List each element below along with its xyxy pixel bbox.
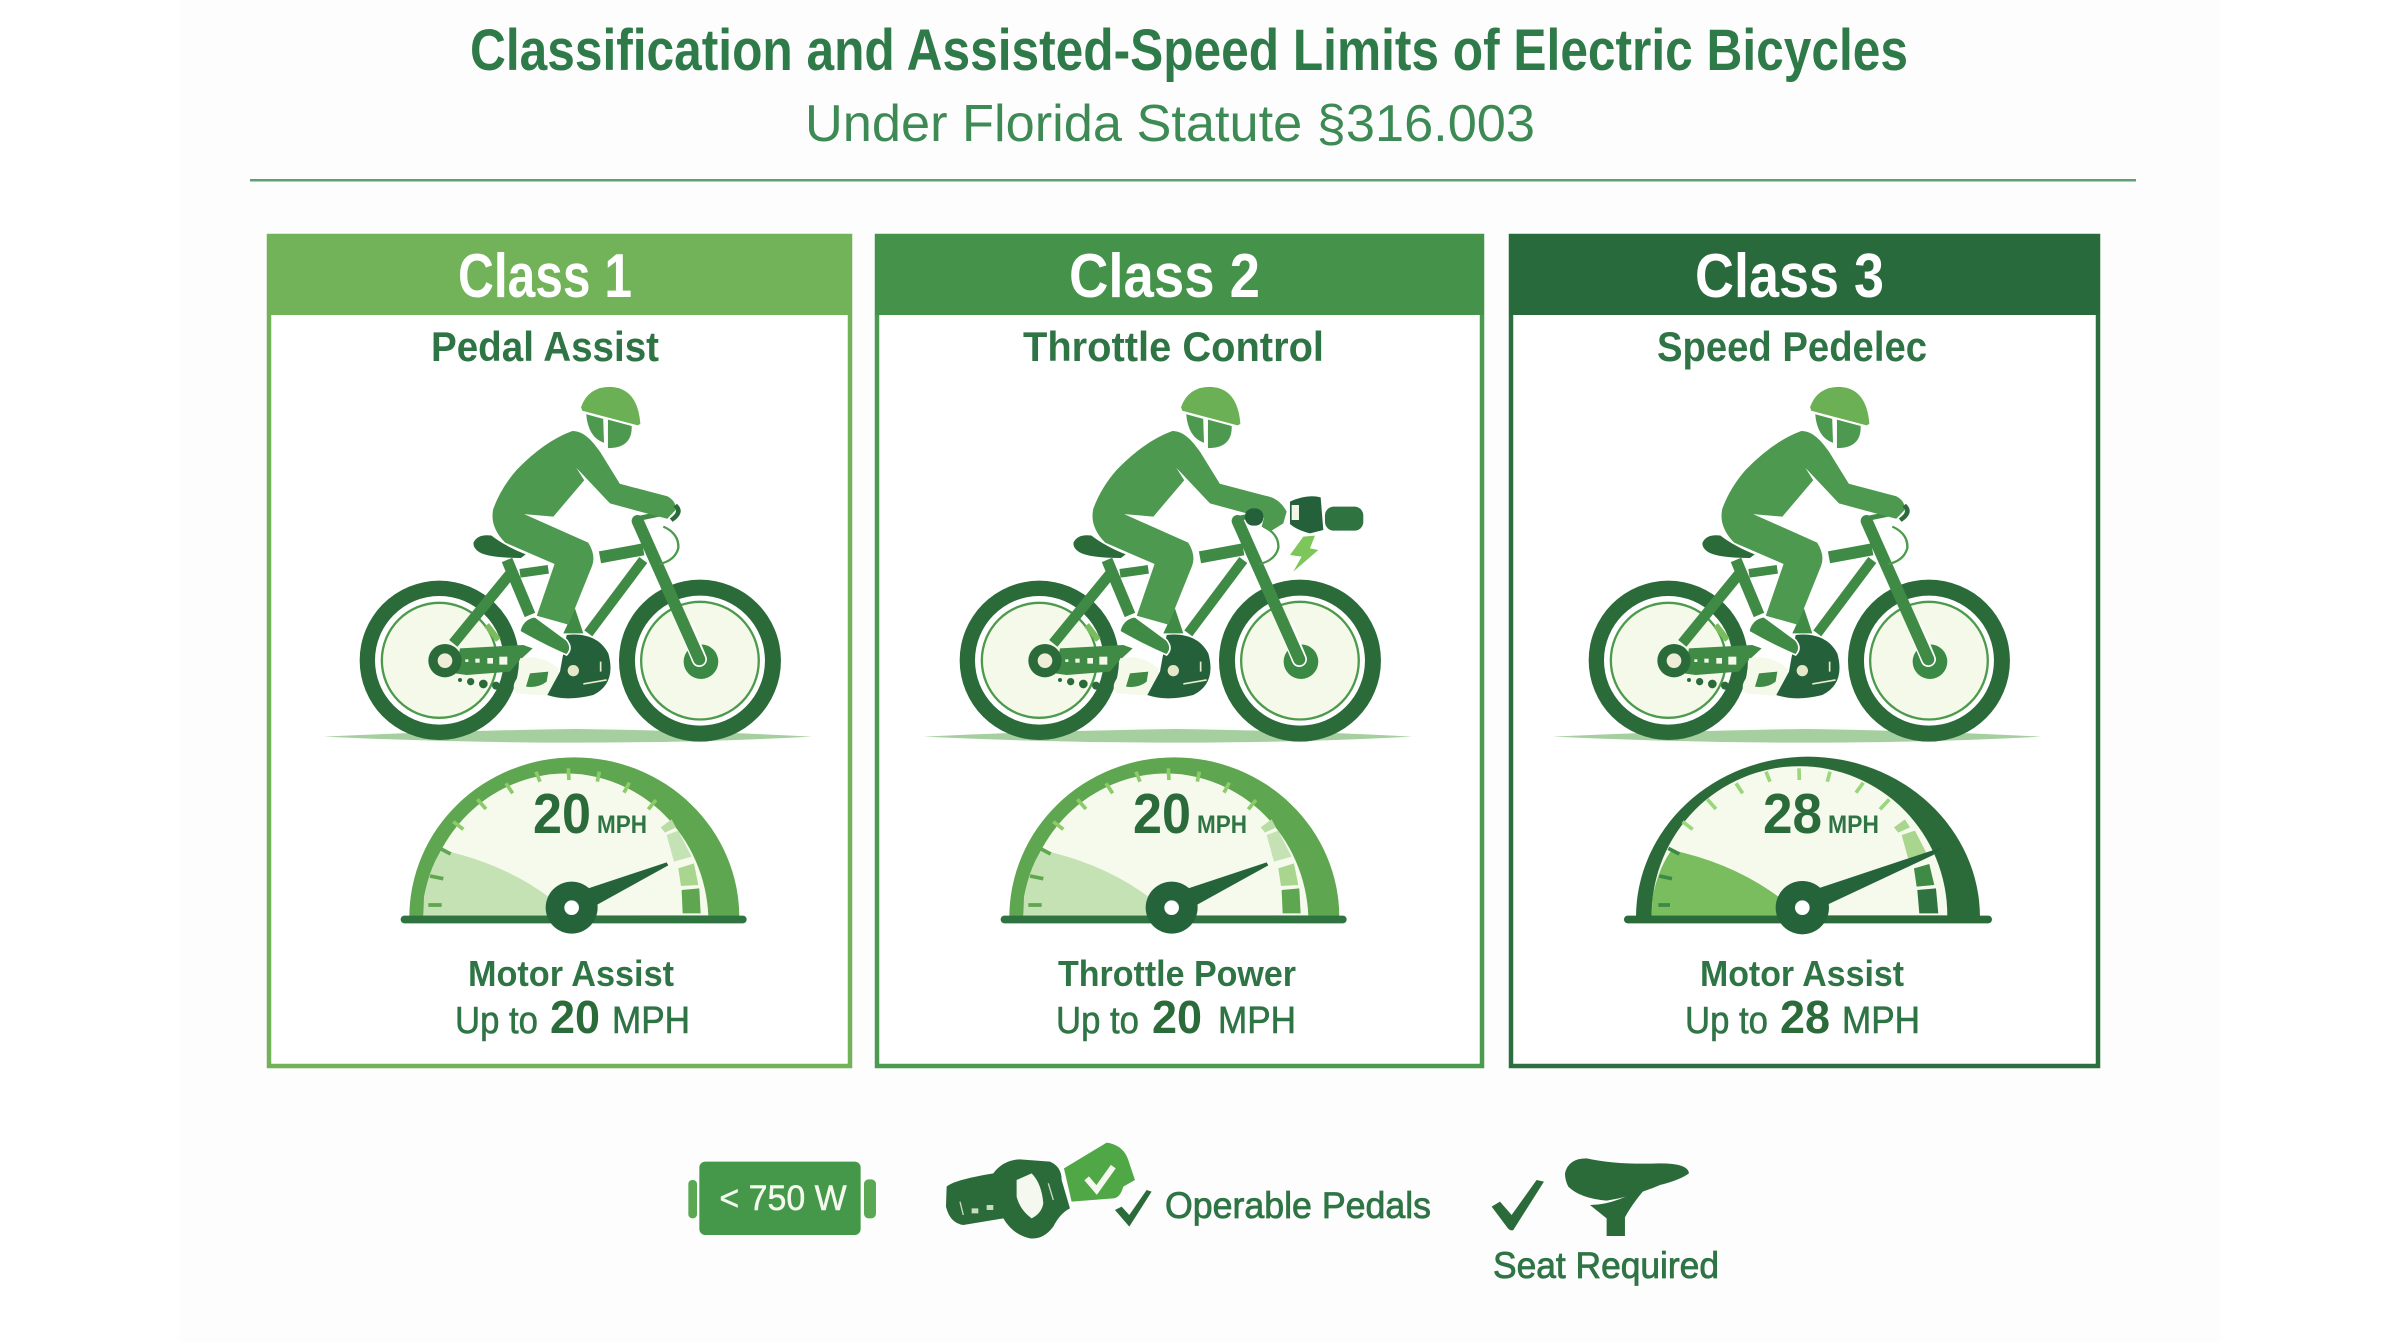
- class 3 speed caption: 28: [1780, 991, 1830, 1043]
- class 2 header band: [875, 234, 1484, 315]
- class 3 heading: Class 3: [1695, 242, 1884, 311]
- icon: rider on bicycle, class 3: [1553, 387, 2041, 743]
- class 3 subtitle: Speed Pedelec: [1657, 323, 1927, 370]
- panel: class 1: [267, 234, 852, 1066]
- panel frame: [1511, 236, 2098, 1066]
- class 3 speed caption: Up to: [1685, 1000, 1768, 1042]
- class 1 heading: Class 1: [458, 242, 632, 311]
- icon: check and bicycle seat: [1492, 1158, 1689, 1236]
- class 1 speed caption: [455, 953, 690, 1043]
- speedometer: 20 mph: MPH: [1197, 811, 1247, 839]
- class 1 subtitle: Pedal Assist: [431, 323, 659, 370]
- speedometer: 28 mph: [1624, 757, 1992, 934]
- class 1 speed caption: 20: [550, 991, 600, 1043]
- class 2 speed caption: Throttle Power: [1058, 953, 1296, 994]
- subtitle: Under Florida Statute §316.003: [805, 95, 1535, 153]
- panel frame: [269, 236, 850, 1066]
- panel frame: [877, 236, 1482, 1066]
- class 1 speed caption: Up to: [455, 1000, 538, 1042]
- class 3 speed caption: Motor Assist: [1700, 953, 1904, 994]
- footer requirements row: [688, 1143, 1719, 1286]
- icon: rider on bicycle, class 1: [324, 387, 812, 743]
- icon: pedal with check tag: [946, 1143, 1135, 1239]
- icon: battery under 750 W: < 750 W: [719, 1179, 847, 1218]
- class 2 subtitle: Throttle Control: [1023, 323, 1324, 370]
- operable pedals check and label: Operable Pedals: [1165, 1185, 1431, 1226]
- seat required label: Seat Required: [1493, 1245, 1719, 1286]
- panel: class 2: [875, 234, 1484, 1066]
- speedometer: 20 mph: 20: [533, 782, 591, 846]
- class 2 speed caption: Up to: [1056, 1000, 1139, 1042]
- speedometer: 28 mph: 28: [1763, 782, 1822, 846]
- speedometer: 20 mph: [401, 757, 747, 934]
- icon: battery under 750 W: [688, 1162, 876, 1235]
- speedometer: 20 mph: MPH: [597, 811, 647, 839]
- speedometer: 20 mph: 20: [1133, 782, 1191, 846]
- class 2 speed caption: 20: [1152, 991, 1202, 1043]
- icon: throttle grip with lightning bolt: [1245, 496, 1363, 572]
- class 3 speed caption: MPH: [1842, 1000, 1920, 1042]
- class 1 speed caption: Motor Assist: [468, 953, 674, 994]
- title: Classification and Assisted-Speed Limits of Electric Bicycles: [470, 18, 1908, 83]
- class 3 header band: [1509, 234, 2100, 315]
- class 1 speed caption: MPH: [612, 1000, 690, 1042]
- class 1 header band: [267, 234, 852, 315]
- speedometer: 20 mph: [1001, 757, 1347, 934]
- panel: class 3: [1509, 234, 2100, 1066]
- class 2 speed caption: [1056, 953, 1296, 1043]
- icon: rider on bicycle, class 2: [924, 387, 1412, 743]
- class 2 heading: Class 2: [1069, 242, 1260, 311]
- class 2 speed caption: MPH: [1218, 1000, 1296, 1042]
- class 3 speed caption: [1685, 953, 1920, 1043]
- speedometer: 28 mph: MPH: [1828, 811, 1879, 839]
